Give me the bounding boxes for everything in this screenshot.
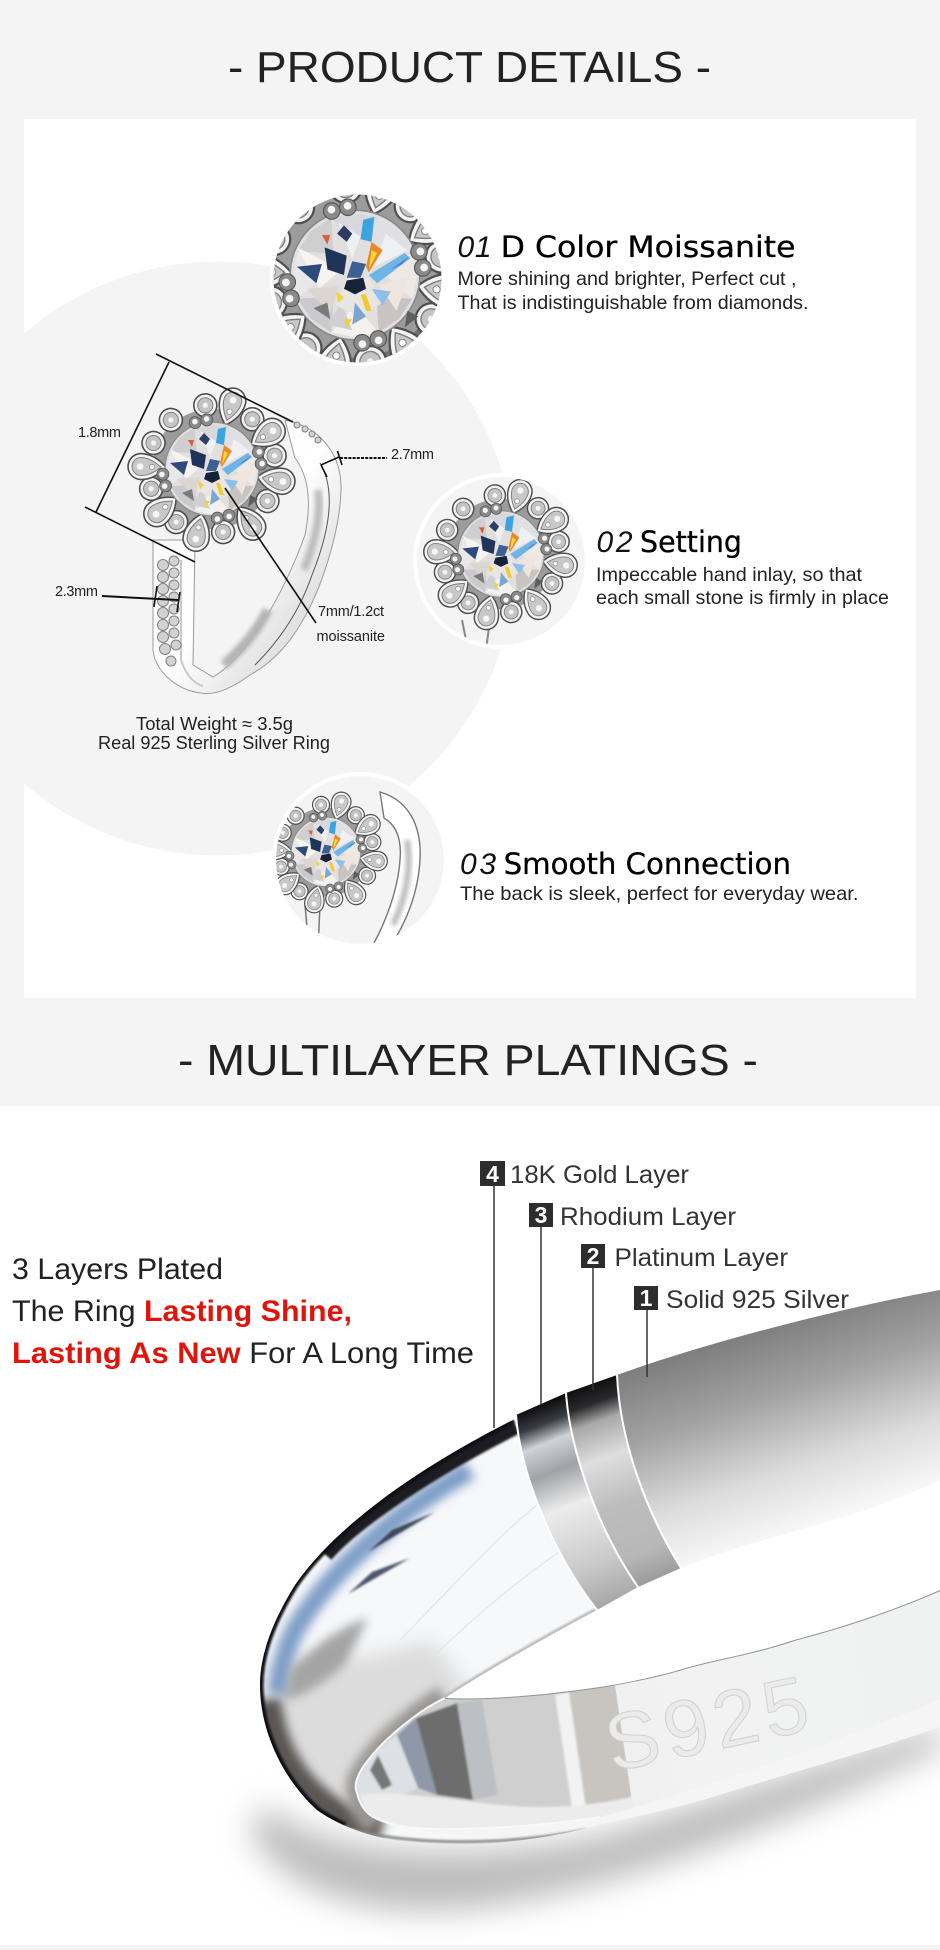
flower head [128, 385, 297, 554]
callout 3: rhodium layer: Rhodium Layer [560, 1203, 736, 1231]
panel: multilayer platings [0, 1106, 940, 1945]
ring silhouette: polished layer [260, 1290, 940, 1845]
body 02: Impeccable hand inlay, so that [596, 564, 863, 586]
detail 02: setting [413, 473, 889, 650]
title: product details: - PRODUCT DETAILS - [228, 43, 711, 92]
detail 02: setting: Setting [640, 525, 742, 559]
body 01: More shining and brighter, Perfect cut , [458, 268, 796, 290]
ring illustration with dimensions: 2.3mm [55, 584, 98, 600]
callout 2: platinum layer [581, 1243, 788, 1390]
circle photo: stone close-up [274, 194, 442, 362]
detail 03: smooth connection: Smooth Connection [504, 847, 791, 881]
callout 4: 18K gold layer [480, 1161, 689, 1428]
inner wall [616, 1674, 690, 1808]
ring illustration with dimensions: moissanite [316, 629, 385, 645]
pave stones on shank [158, 422, 321, 666]
dimension labels: 1.8mm [78, 425, 121, 441]
detail 01: D color moissanite: D Color Moissanite [501, 230, 796, 264]
text block: lasting shine [12, 1253, 474, 1370]
large ring cross-section [260, 1290, 940, 1845]
text block: lasting shine: Lasting As New For A Long Time [12, 1337, 474, 1370]
callout 4: 18K gold layer: 18K Gold Layer [510, 1161, 689, 1189]
layer divider lines [516, 1375, 681, 1610]
outer left shading [262, 1700, 380, 1836]
callout 3: rhodium layer [529, 1202, 736, 1405]
callout 1: solid 925 silver: 1 [640, 1285, 653, 1311]
detail 01: D color moissanite: That is indistinguishable from diamonds. [458, 292, 808, 314]
callout 2: platinum layer: Platinum Layer [614, 1244, 788, 1272]
circle photo: flower setting [417, 477, 585, 650]
callout 1: solid 925 silver: Solid 925 Silver [666, 1286, 849, 1314]
text block: lasting shine: 3 Layers Plated [12, 1253, 223, 1286]
ring illustration with dimensions: Real 925 Sterling Silver Ring [98, 733, 330, 753]
heading 03: 03 [460, 848, 496, 881]
heading 01: 01 [458, 231, 492, 264]
layer: rhodium band [516, 1393, 638, 1610]
panel: product details [0, 119, 916, 998]
ring illustration with dimensions: 7mm/1.2ct [318, 604, 384, 620]
callout 4: 18K gold layer: 4 [486, 1161, 499, 1187]
callout 3: rhodium layer: 3 [535, 1202, 547, 1228]
inner reflection [356, 1686, 632, 1828]
lower grey body [265, 1640, 470, 1810]
ring illustration with dimensions: 2.7mm [391, 447, 434, 463]
circle photo: ring side view [276, 776, 444, 944]
dimension lines [85, 354, 387, 623]
heading 02: 02 [596, 526, 633, 559]
engraving S925: S925 [597, 1659, 816, 1789]
layer callouts [480, 1161, 849, 1428]
layer: solid silver [617, 1290, 940, 1568]
weight caption: Total Weight ≈ 3.5g [136, 714, 293, 734]
callout 2: platinum layer: 2 [587, 1243, 599, 1269]
callout 1: solid 925 silver [634, 1285, 849, 1377]
body 03: The back is sleek, perfect for everyday wear. [460, 883, 858, 905]
background circle [0, 262, 515, 856]
detail 03: smooth connection [264, 772, 859, 950]
layer: platinum band [566, 1375, 681, 1587]
ring shank [153, 420, 341, 694]
text block: lasting shine: The Ring Lasting Shine, [12, 1295, 352, 1328]
ring illustration with dimensions [55, 354, 434, 753]
inner lip [357, 1700, 940, 1837]
detail 02: setting: each small stone is firmly in place [596, 587, 889, 609]
title: multilayer platings: - MULTILAYER PLATINGS - [178, 1036, 758, 1085]
detail 01: D color moissanite [270, 194, 807, 366]
ring shadow [250, 1725, 940, 1911]
